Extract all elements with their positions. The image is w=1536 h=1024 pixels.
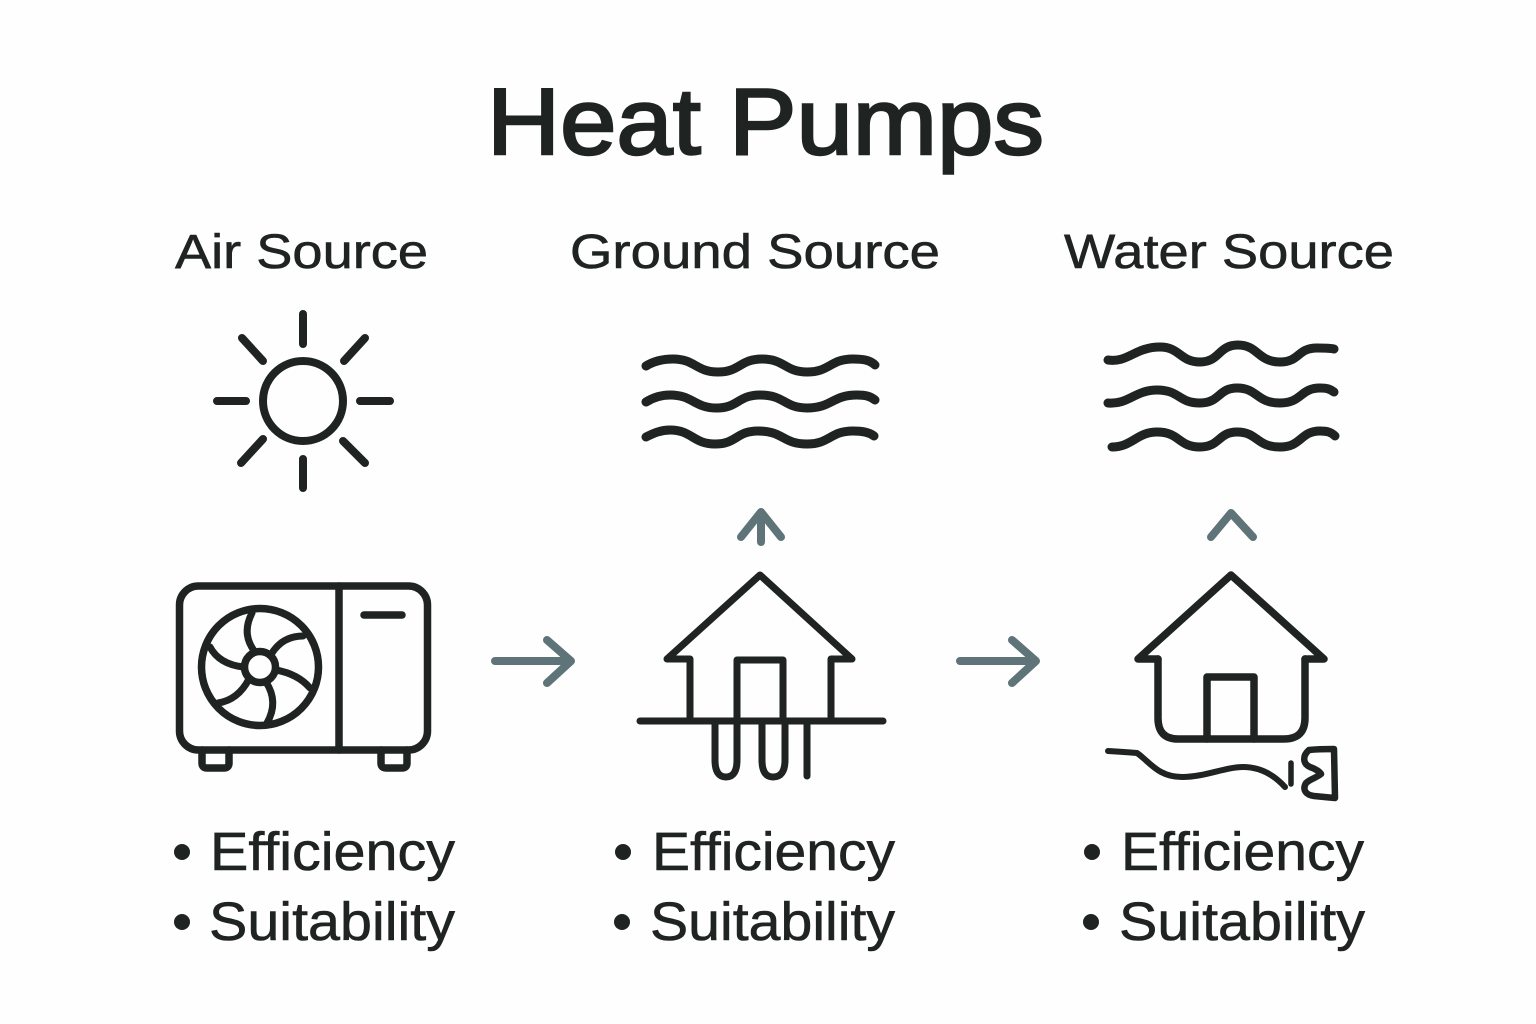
heading: ground source: Ground Source (570, 226, 940, 279)
arrow: ground to water (960, 640, 1036, 683)
icon: house with ground loops (640, 575, 883, 777)
bullet list: air source: Suitability (209, 892, 455, 952)
icon: house with water pipe (1108, 575, 1335, 798)
icon: water waves (1108, 345, 1335, 447)
bullet list: air source (174, 822, 455, 952)
bullet list: ground source (614, 822, 895, 952)
heading: water source: Water Source (1064, 226, 1394, 279)
panel: ground source (570, 226, 940, 952)
bullet list: water source (1083, 822, 1365, 952)
icon: outdoor heat pump unit with fan (180, 586, 428, 768)
title: Heat Pumps (487, 69, 1044, 174)
bullet list: water source: Suitability (1119, 892, 1365, 952)
panel: air source (174, 226, 455, 952)
icon: sun (217, 314, 390, 488)
heading: air source: Air Source (175, 226, 428, 279)
bullet list: water source: Efficiency (1121, 822, 1364, 882)
icon: ground waves (646, 359, 875, 444)
bullet list: ground source: Efficiency (652, 822, 895, 882)
arrow: ground up (741, 512, 781, 542)
bullet list: air source: Efficiency (210, 822, 455, 882)
arrow: air to ground (495, 640, 571, 683)
panel: water source (1064, 226, 1394, 952)
arrow: water chevron up (1211, 513, 1253, 537)
bullet list: ground source: Suitability (650, 892, 895, 952)
